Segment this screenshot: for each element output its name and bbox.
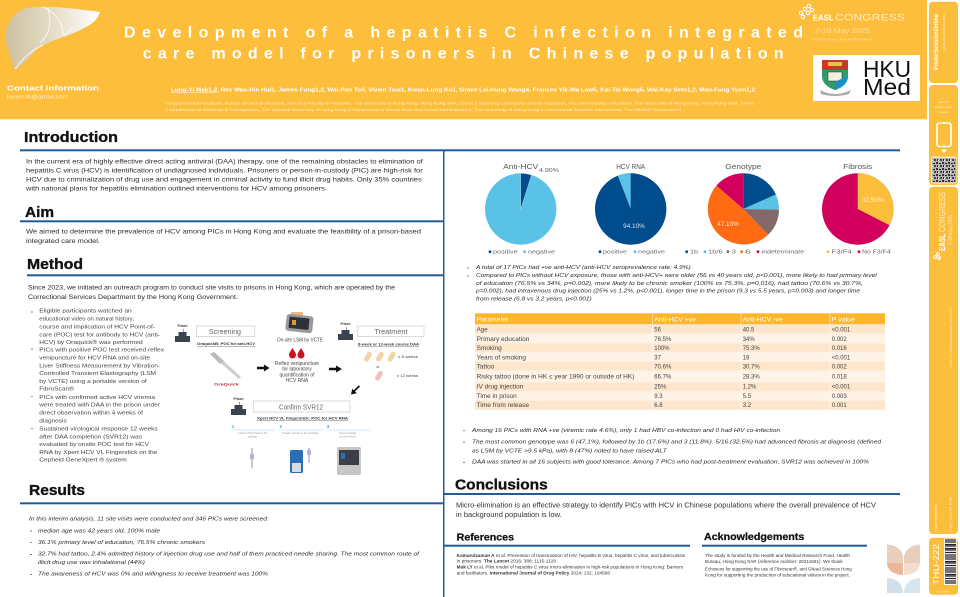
text: method bullets: [31, 309, 164, 464]
table rows: [475, 313, 885, 410]
table rows: 3.2: [743, 403, 752, 409]
table rows: 56: [654, 328, 662, 334]
sidebar: EASL congress: [929, 187, 958, 534]
HKU Med logo: [813, 55, 920, 101]
table rows: IV drug injection: [477, 385, 523, 391]
heading: method: Method: [27, 257, 83, 273]
text: seroprevalence findings: p=0.002), had intravenous drug injection (25% vs 1.2%, p<0.001), longer time in the prison (9.3 vs 5.5 years, p=0.003) and longer time: [475, 288, 860, 294]
icon: portable fibroscan: [277, 312, 324, 344]
icon: prison treatment: [338, 322, 353, 340]
table header: Anti-HCV -ve: [743, 318, 783, 324]
sidebar: EASL congress: Lung Yi Loey Mak: [948, 497, 952, 532]
arrow: screening to reflex: [257, 364, 270, 372]
table rows: 0.002: [832, 364, 847, 370]
table rows: <0.001: [832, 355, 851, 361]
text: acknowledgements body: Echosens for supporting the use of Fibroscan®, and Gilead Sciences Hong: [705, 565, 852, 571]
table rows: 0.001: [832, 403, 847, 409]
table rows: <0.001: [832, 385, 851, 391]
EASL congress logo: EASL: [813, 13, 834, 23]
text: viremia and genotype findings: Among 16 PICs with RNA +ve (viremic rate 4.6%), only 1 had HBV co-infection and 0 had HIV co-infection: [471, 428, 780, 434]
table rows: 34%: [743, 337, 755, 343]
heading: conclusions: Conclusions: [455, 477, 548, 493]
icon: decorative tulip: [887, 544, 920, 593]
steps: fingerstick procedure: [231, 424, 370, 475]
panel: introduction: [24, 130, 424, 192]
pie chart: genotype: 1b/6: [708, 250, 723, 256]
HKU Med logo: Med: [863, 74, 911, 100]
pie chart: fibrosis: F3/F4: [832, 250, 853, 256]
arrow: treatment to confirm: [351, 385, 360, 394]
panel: acknowledgements: [704, 532, 852, 578]
sidebar: poster session online: PosterSessionOnline: [934, 13, 940, 70]
text: method intro: Since 2023, we initiated an outreach program to conduct site visits to prisons in Hong Kong, which are operated by the: [28, 285, 395, 292]
sidebar: scan to download with QR code: download the: [935, 105, 953, 109]
pie chart: genotype: 6: [745, 250, 751, 256]
text: method bullets: after DAA completion (SVR12) was: [39, 434, 142, 440]
sidebar: EASL congress: EASL: [938, 234, 947, 251]
text: introduction body: HCV due to criminalization of drug use and engagement in criminal activity to fund illicit drug habits. Only 35% countries: [26, 176, 422, 184]
steps: fingerstick procedure: on GeneXpert: [340, 434, 356, 438]
text: method bullets: evaluated by onsite POC test for HCV: [39, 442, 149, 448]
table rows: Time in prison: [477, 394, 517, 400]
text: results list: 36.1% primary level of education, 76.5% chronic smokers: [38, 540, 205, 546]
table rows: 28.3%: [743, 375, 760, 381]
icon: oral swab test: [210, 352, 241, 386]
table rows: 70.6%: [654, 364, 672, 370]
icon: prison confirm: Prison: [234, 397, 244, 401]
pie chart: fibrosis: 32.50%: [862, 197, 884, 204]
text: results list: In this interim analysis, 11 site visits were conducted and 346 PICs were screened:: [29, 516, 269, 522]
sidebar: poster session online: [929, 2, 958, 83]
text: method bullets: Sustained virological response 12 weeks: [39, 426, 158, 432]
step: screening: Screening: [209, 329, 241, 336]
pie chart: anti-HCV: Anti-HCV: [503, 162, 539, 171]
table rows: 1.2%: [743, 385, 757, 391]
step: treatment: Treatment: [374, 329, 408, 336]
text: seroprevalence findings: of education (76.5% vs 34%, p=0.002), more likely to be chronic smoker (100% vs 75.3%, p=0.016), had tattoo (70.6% vs 30.7%,: [476, 281, 863, 287]
arrow: reflex to treatment: [329, 366, 342, 372]
table rows: Time from release: [477, 403, 530, 409]
icon: treatment pills: or: [376, 365, 380, 369]
title: Development of a hepatitis C infection integrated: [124, 24, 803, 41]
text: seroprevalence findings: from release (6.8 vs 3.2 years, p<0.001): [476, 297, 592, 303]
text: method bullets: venipuncture for HCV RNA and on-site: [39, 356, 150, 362]
authors: Lung-Yi Mak1,2 , Rex Wan-Hin Hui1, James Fung1,2, Wai-Pan To3, Vivien Tsui1, Kwan-Lung Ko1, Grace Lai-Hung Wong4, Frances Yik-Wa Law5, Kai-Tai Wong5, Wai-Kay Seto1,2, Man-Fung Yuen1,2: [171, 87, 755, 93]
steps: fingerstick procedure: 3: [327, 424, 330, 429]
pie chart: fibrosis: No F3/F4: [862, 250, 892, 256]
step: confirm SVR12: [253, 401, 350, 420]
pie chart: genotype: [685, 162, 804, 256]
step: screening: [196, 326, 256, 346]
pie chart: anti-HCV: positive: [493, 250, 518, 256]
text: method bullets: RNA by Xpert HCV VL Fingerstick on the: [39, 450, 157, 456]
text: method bullets: were treated with DAA in the prison under: [38, 403, 160, 409]
sidebar: poster session online: powered by Poster Session Online: [942, 13, 946, 50]
icon: prison screening: [175, 324, 190, 342]
header banner: [0, 0, 927, 119]
table header: Anti-HCV +ve: [654, 318, 697, 324]
text: reflex venipuncture: [275, 361, 319, 384]
text: results list: illicit drug use was inhalational (44%): [38, 560, 145, 566]
pie chart: HCV RNA: positive: [603, 250, 627, 256]
heading: aim: Aim: [25, 205, 54, 221]
pie chart: genotype: Genotype: [725, 162, 761, 171]
pie chart: HCV RNA: 94.10%: [623, 223, 645, 230]
contact information: Contact information: [7, 84, 100, 93]
HKU Med logo: HKU: [863, 56, 911, 82]
table rows: 37: [654, 355, 662, 361]
pie chart: anti-HCV: [485, 162, 559, 256]
panel: aim: [25, 205, 422, 245]
text: viremia and genotype findings: [463, 428, 882, 466]
table rows: 0.016: [832, 346, 847, 352]
step: treatment: [358, 326, 424, 347]
icon: portable fibroscan: On-site LSM by VCTE: [277, 338, 324, 344]
table rows: 66.7%: [654, 375, 672, 381]
table rows: 5.5: [743, 394, 752, 400]
table rows: Tattoo: [477, 364, 495, 370]
text: reflex venipuncture: for laboratory: [282, 367, 312, 373]
table rows: Years of smoking: [477, 355, 526, 361]
text: reflex venipuncture: HCV RNA: [286, 378, 309, 384]
pie chart: HCV RNA: HCV RNA: [616, 162, 646, 171]
pie chart: HCV RNA: [595, 162, 666, 256]
icon: liver: [5, 7, 100, 70]
EASL congress logo: [799, 4, 905, 42]
table: risk factors: [475, 313, 885, 410]
heading: acknowledgements: Acknowledgements: [704, 532, 805, 543]
icon: treatment pills: x 8 weeks: [398, 355, 418, 359]
table rows: 30.7%: [743, 364, 760, 370]
table header: P value: [832, 318, 856, 324]
heading: introduction: Introduction: [24, 130, 118, 146]
sidebar: scan to download with QR code: [929, 85, 958, 185]
text: introduction body: In the current era of highly effective direct acting antiviral (DAA) therapy, one of the remaining obstacles to elimination of: [26, 158, 423, 166]
step: screening: OraquickB: POC for anti-HCV: [197, 342, 256, 346]
table rows: <0.001: [832, 328, 851, 334]
contact information: [7, 84, 100, 101]
flow diagram: [175, 312, 424, 475]
text: method bullets: by VCTE) using a portable version of: [39, 379, 147, 385]
text: introduction body: hepatitis C virus (HCV) is identification of undiagnosed individuals. Prisoners or person-in-custody (PIC) are high-risk for: [26, 168, 424, 174]
steps: fingerstick procedure: capillary: [248, 434, 258, 438]
step: confirm SVR12: Confirm SVR12: [279, 402, 323, 411]
text: results list: The awareness of HCV was 0% and willingness to receive treatment was 100%: [38, 572, 268, 578]
table rows: 76.5%: [654, 337, 672, 343]
text: method bullets: PICs with positive POC test received reflex: [39, 348, 164, 354]
icon: prison treatment: Prison: [341, 322, 351, 326]
text: viremia and genotype findings: The most common genotype was 6 (47.1%), followed by 1b (17.6%) and 3 (11.8%). 5/16 (32.5%) had advanced fibrosis at diagnosis (defined: [472, 439, 882, 445]
sidebar: scan to download with QR code: poster: [939, 110, 948, 114]
step: confirm SVR12: Xpert HCV VL Fingerstick: POC for HCV RNA: [257, 416, 349, 420]
text: reference list: in prisoners. The Lancet 2016; 388: 1115-1126: [457, 559, 556, 564]
sidebar: EASL congress: Viral Hepatitis: [933, 505, 938, 532]
sidebar: poster number and barcode: [929, 538, 958, 595]
text: acknowledgements body: Bureau, Hong Kong SAR (reference number: 20211661). We thank: [705, 559, 843, 564]
table rows: 6.8: [654, 403, 663, 409]
table header: Parameter: [477, 318, 508, 324]
text: results list: [29, 516, 421, 578]
text: viremia and genotype findings: DAA was started in all 16 subjects with good tolerance. Among 7 PICs who had post-treatment evaluation, SVR12 was achieved in 100%: [472, 460, 869, 466]
table rows: 0.002: [832, 337, 847, 343]
sidebar: scan to download with QR code: Scan to: [938, 100, 949, 104]
table rows: Primary education: [477, 337, 529, 343]
title: care model for prisoners in Chinese population: [143, 46, 784, 63]
text: aim body: integrated care model.: [26, 238, 100, 245]
text: acknowledgements body: Kong for supporting the production of educational videos in the project.: [705, 573, 850, 578]
pie chart: fibrosis: [822, 162, 893, 256]
text: method bullets: Eligible participants watched an: [39, 309, 132, 315]
text: method bullets: direct observation within 4 weeks of: [39, 411, 143, 417]
table rows: 0.018: [832, 375, 847, 381]
text: method bullets: care (POC) test for antibody to HCV (anti-: [39, 332, 160, 338]
pie chart: fibrosis: Fibrosis: [843, 162, 872, 171]
text: reference list: [457, 553, 686, 575]
pie chart: anti-HCV: 4.90%: [539, 168, 559, 174]
text: seroprevalence findings: [467, 265, 878, 303]
steps: fingerstick procedure: Collect 100µl blood to the: [238, 431, 268, 435]
text: reference list: Kamarulzaman A et al. Prevention of transmission of HIV, hepatitis B virus, hepatitis C virus, and tuberculosis: [457, 553, 686, 558]
table rows: Risky tattoo (done in HK ≤ year 1990 or outside of HK): [477, 375, 634, 381]
pie chart: genotype: 3: [732, 250, 736, 256]
panel: conclusions: [455, 477, 876, 519]
text: conclusions body: Micro-elimination is an effective strategy to identify PICs with HCV in Chinese populations where the overall prevalence of HCV: [456, 503, 876, 510]
EASL congress logo: Amsterdam, the Netherlands: [813, 38, 873, 42]
panel: references: [457, 532, 686, 575]
table rows: 9.3: [654, 394, 663, 400]
sidebar: poster number and barcode: Copyright: [937, 590, 950, 594]
pie chart: genotype: 1b: [690, 250, 698, 256]
text: seroprevalence findings: A total of 17 PICs had +ve anti-HCV (anti-HCV seroprevalence rate: 4.9%): [475, 265, 691, 271]
text: acknowledgements body: [705, 553, 852, 578]
table rows: Age: [477, 328, 488, 334]
icon: treatment pills: x 12 weeks: [397, 374, 418, 378]
text: method intro: [28, 285, 395, 301]
text: results list: 32.7% had tattoo, 2.4% admitted history of injection drug use and half of them practiced needle sharing. The most common route of: [38, 552, 421, 558]
pie chart: genotype: 47.10%: [717, 221, 739, 228]
steps: fingerstick procedure: 2: [279, 424, 282, 429]
text: conclusions body: [456, 503, 876, 519]
text: method bullets: FibroScan®: [39, 386, 75, 393]
table header: [475, 313, 885, 324]
text: method bullets: educational video on natural history,: [39, 316, 134, 322]
table rows: 25%: [654, 385, 667, 391]
text: conclusions body: in background population is low.: [456, 512, 562, 519]
text: acknowledgements body: The study is funded by the Health and Medical Research Fund, Health: [705, 553, 850, 558]
text: method bullets: diagnosis: [39, 419, 67, 425]
panel: method: [27, 257, 424, 475]
text: reflex venipuncture: Reflex venipuncture: [275, 361, 319, 367]
text: method intro: Correctional Services Department by the Hong Kong Government.: [28, 294, 238, 301]
text: method bullets: HCV) by Oraquick® was performed: [39, 339, 143, 346]
steps: fingerstick procedure: Transfer sample to the cartridge: [282, 431, 319, 435]
table rows: 75.3%: [743, 346, 760, 352]
table rows: 19: [743, 355, 750, 361]
text: reference list: Mak LY et al. Pilot model of hepatitis C virus micro-elimination in high-risk populations in Hong Kong: Barriers: [457, 564, 684, 569]
sidebar: EASL congress: CONGRESS: [938, 192, 947, 232]
heading: results: Results: [29, 483, 85, 499]
table rows: 100%: [654, 346, 670, 352]
EASL congress logo: 7-10 May 2025: [815, 28, 870, 35]
text: viremia and genotype findings: as LSM by VCTE >9.5 kPa), with 8 (47%) noted to have raised ALT: [472, 448, 667, 454]
text: aim body: We aimed to determine the prevalence of HCV among PICs in Hong Kong and evaluate the feasibility of a prison-based: [26, 229, 422, 236]
icon: prison screening: Prison: [178, 324, 188, 328]
affiliations: 1 Department of Medicine, School of Clinical Medicine, The LKS Faculty of Medicine, The University of Hong Kong, Hong Kong SAR, China 2 State Key Laboratory of Liver Research, The LKS Faculty of Medicine, The University of Hong Kong, Hong Kong SAR, China: [165, 102, 755, 106]
panel: results: [29, 483, 421, 578]
table rows: 0.003: [832, 394, 847, 400]
text: aim body: [26, 229, 422, 245]
affiliations: [165, 102, 755, 112]
sidebar: EASL congress: 7-10 May 2025: [948, 215, 954, 245]
text: method bullets: Controlled Transient Elastography (LSM: [39, 371, 156, 377]
sidebar: EASL congress: DOI: 10.26226/morressier.2025.222: [949, 307, 953, 367]
icon: blood drops: [289, 348, 304, 358]
panel: sidebar: [929, 2, 958, 595]
icon: treatment pills: [363, 351, 418, 382]
text: reflex venipuncture: quantification of: [279, 372, 315, 378]
affiliations: 3 Department of Medicine & Therapeutics, The Chinese University of Hong Kong 4 Department of Social Work and Social Administration, The University of Hong Kong 5 Correctional Services Department, The HKSAR Government: [165, 108, 682, 112]
pie chart: anti-HCV: negative: [528, 250, 555, 256]
text: introduction body: [25, 158, 424, 192]
table rows: 40.5: [743, 328, 755, 334]
text: method bullets: Cepheid GeneXpert ® system: [39, 457, 127, 464]
step: treatment: 8-week or 12-week course DAA: [358, 343, 420, 347]
steps: fingerstick procedure: 1: [232, 424, 235, 429]
icon: prison confirm: [231, 397, 246, 415]
pie chart: genotype: indeterminate: [762, 250, 804, 256]
steps: fingerstick procedure: Insert cartridge: [339, 431, 357, 435]
text: reference list: and facilitators. International Journal of Drug Policy 2024; 132: 104566: [457, 570, 610, 575]
contact information: loeymak@gmail.com: [7, 95, 69, 101]
section rules: [20, 149, 900, 597]
heading: references: References: [457, 532, 514, 543]
text: method bullets: Liver Stiffness Measurement by Vibration-: [39, 363, 160, 369]
text: results list: median age was 42 years old, 100% male: [38, 528, 160, 534]
table rows: Smoking: [477, 346, 502, 352]
text: seroprevalence findings: Compared to PICs without HCV exposure, those with anti-HCV+ were older (56 vs 40 years old, p<0.001), more likely to had primary level: [476, 273, 878, 279]
sidebar: poster number and barcode: THU-222: [932, 543, 941, 585]
text: introduction body: with national plans for hepatitis elimination outlined interventions for HCV among prisoners.: [25, 186, 327, 192]
EASL congress logo: CONGRESS: [835, 13, 905, 23]
text: method bullets: PICs with confirmed active HCV viremia: [39, 395, 156, 401]
text: method bullets: course and implication of HCV Point-of-: [39, 324, 155, 330]
title: [124, 24, 803, 63]
icon: oral swab test: OraQuick: [214, 382, 239, 386]
pie chart: HCV RNA: negative: [638, 250, 665, 256]
